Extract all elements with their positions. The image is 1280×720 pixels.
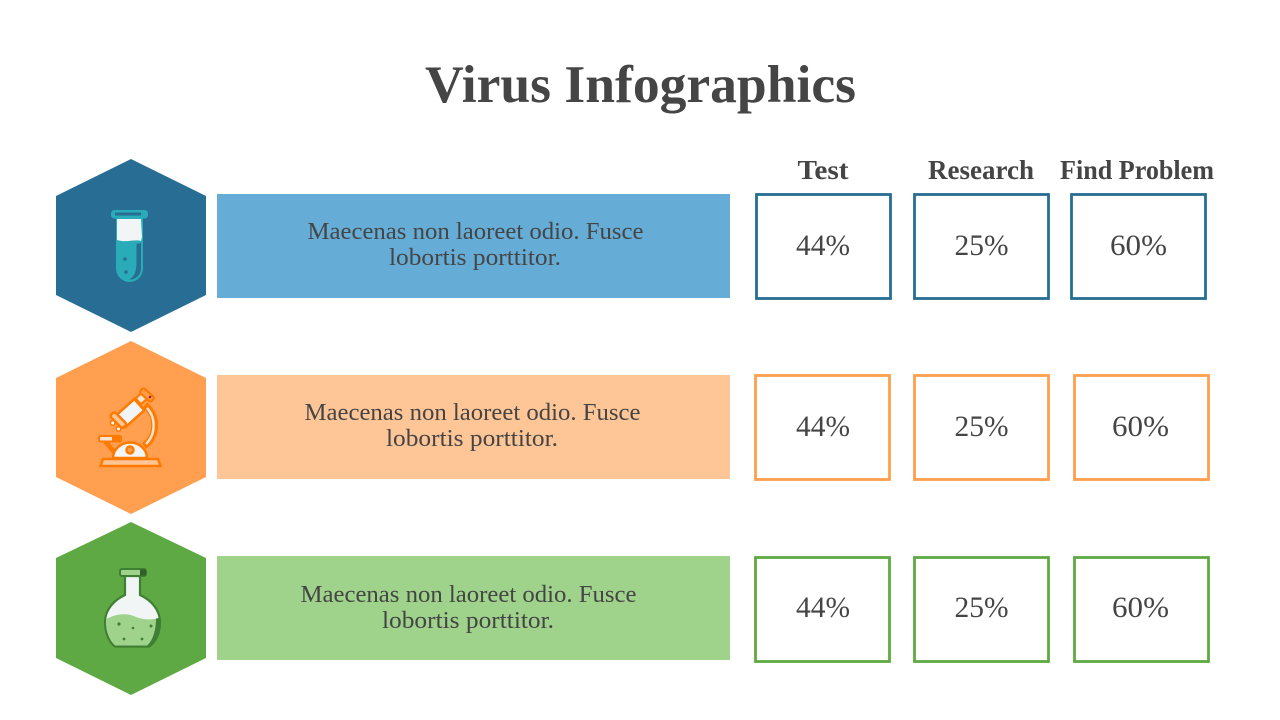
description text: row 3: Maecenas non laoreet odio. Fusce <box>300 582 636 608</box>
icon: flask <box>105 569 160 646</box>
value box: row 1 Research <box>914 194 1048 298</box>
value box: row 3 Research <box>914 558 1048 662</box>
description text: row 1: lobortis porttitor. <box>389 245 561 271</box>
value box: row 2 Research <box>914 376 1048 480</box>
title: Virus Infographics <box>425 56 856 114</box>
description text: row 3 <box>300 582 636 634</box>
description text: row 2: lobortis porttitor. <box>386 426 558 452</box>
value box: row 2 Test <box>756 376 890 480</box>
value box: row 3 Find Problem <box>1074 558 1208 662</box>
value box: row 2 Test: 44% <box>796 410 850 443</box>
bar: green description <box>217 556 730 660</box>
description text: row 1 <box>308 219 644 271</box>
column heading: Test: Test <box>798 155 849 185</box>
value box: row 1 Find Problem <box>1072 194 1206 298</box>
description text: row 3: lobortis porttitor. <box>382 608 554 634</box>
value box: row 1 Find Problem: 60% <box>1110 229 1167 262</box>
value box: row 3 Research: 25% <box>954 591 1008 624</box>
value box: row 3 Test: 44% <box>796 591 850 624</box>
value box: row 1 Test <box>756 194 890 298</box>
icon: test tube <box>111 210 148 282</box>
description text: row 2: Maecenas non laoreet odio. Fusce <box>304 400 640 426</box>
hexagon: blue <box>56 159 206 332</box>
value box: row 1 Research: 25% <box>954 229 1008 262</box>
column heading: Find Problem: Find Problem <box>1060 155 1214 185</box>
column heading: Research: Research <box>928 155 1034 185</box>
value box: row 2 Find Problem <box>1074 376 1208 480</box>
hexagon: green <box>56 522 206 695</box>
hexagon: orange <box>56 341 206 514</box>
bar: orange description <box>217 375 730 479</box>
value box: row 3 Test <box>756 558 890 662</box>
value box: row 3 Find Problem: 60% <box>1112 591 1169 624</box>
description text: row 1: Maecenas non laoreet odio. Fusce <box>308 219 644 245</box>
icon: microscope <box>99 388 160 466</box>
bar: blue description <box>217 194 730 298</box>
value box: row 2 Find Problem: 60% <box>1112 410 1169 443</box>
description text: row 2 <box>304 400 640 452</box>
value box: row 1 Test: 44% <box>796 229 850 262</box>
value box: row 2 Research: 25% <box>954 410 1008 443</box>
